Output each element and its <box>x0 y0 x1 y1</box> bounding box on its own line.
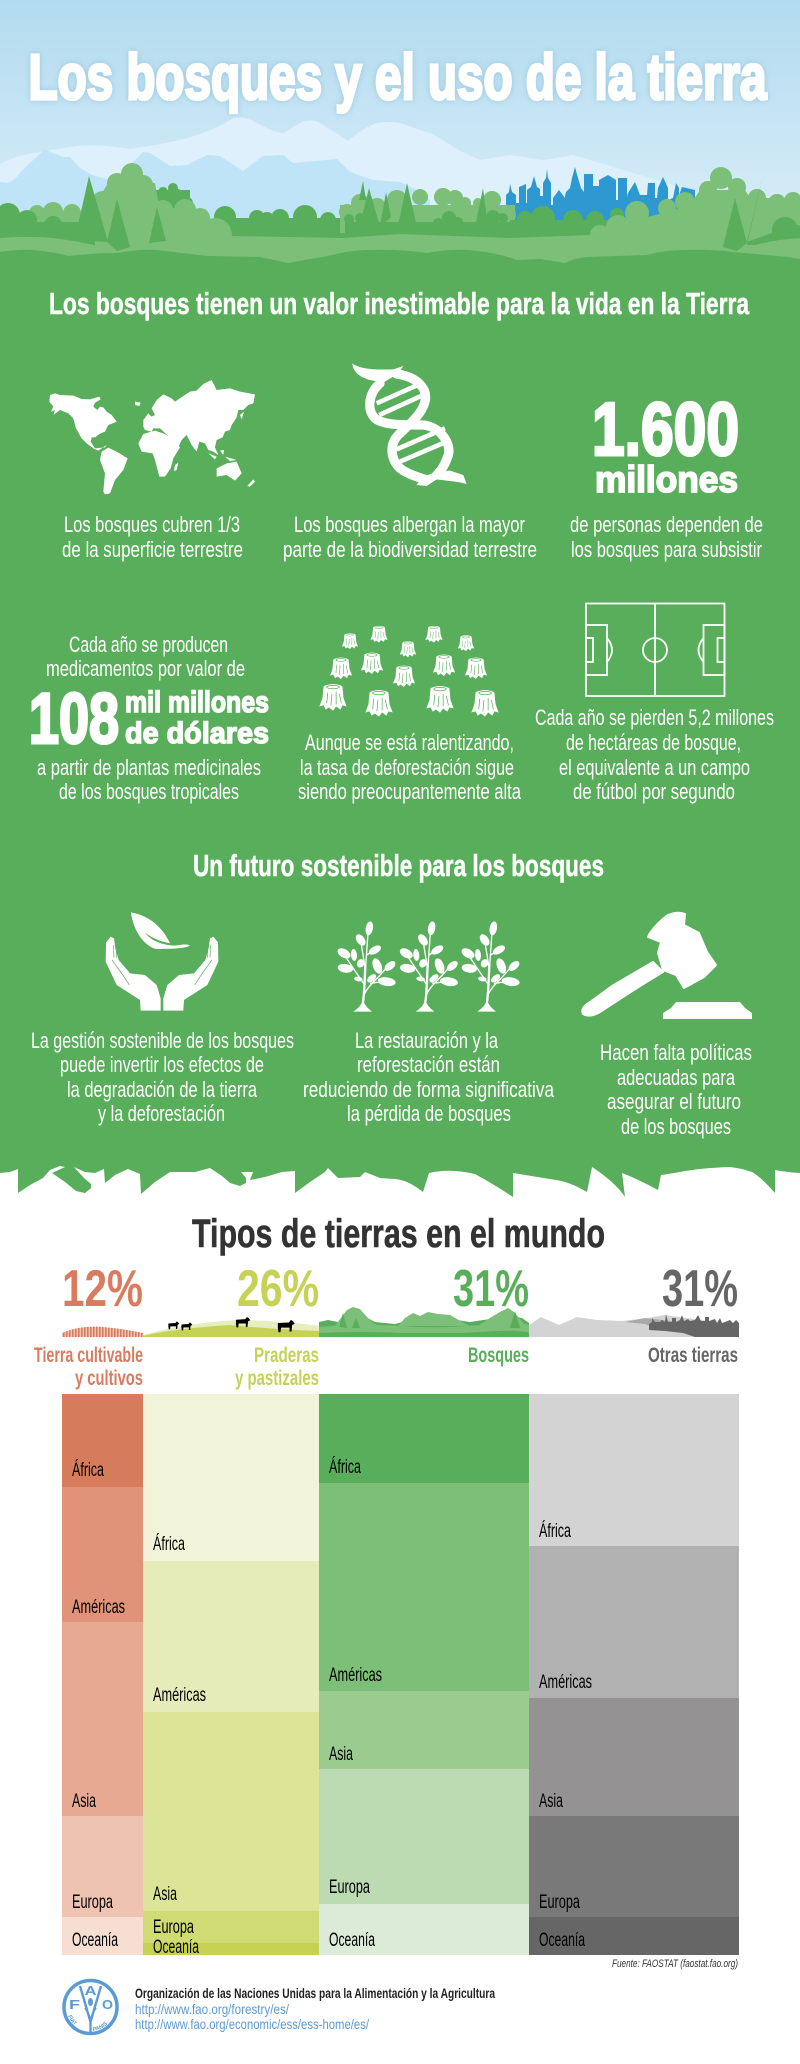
footer: organisation and links: Organización de las Naciones Unidas para la Alimentación y la Agricultura <box>135 1985 495 2001</box>
strip: pasture with animals <box>143 1317 319 1337</box>
panel: hectares lost <box>535 604 774 804</box>
text: deforestation <box>298 730 522 804</box>
panel: medicines: medicamentos por valor de <box>46 656 245 681</box>
stat: 108 mil millones de dólares: mil millones <box>125 686 269 719</box>
chart: land by region, other land column: Asia <box>539 1791 563 1812</box>
icon: FAO logo: O <box>102 1997 113 2012</box>
text: policies <box>600 1040 752 1139</box>
chart: land by region, other land column: Europa <box>539 1892 580 1913</box>
chart: land by region, pasture column: Américas <box>153 1685 206 1706</box>
chart: land by region, cropland column: Américas <box>72 1597 125 1618</box>
category: cropland: y cultivos <box>75 1367 143 1390</box>
source note: Fuente: FAOSTAT (faostat.fao.org) <box>612 1958 738 1970</box>
text: restoration: reduciendo de forma significativa <box>303 1077 555 1102</box>
text: restoration: La restauración y la <box>355 1028 499 1053</box>
text: sustainable management: y la deforestación <box>98 1101 225 1126</box>
chart: land by region, cropland column: Europa <box>72 1892 113 1913</box>
chart: land by region, forest column <box>319 1394 529 1955</box>
icon: tree stumps <box>319 626 499 717</box>
text: forest cover: Los bosques cubren 1/3 <box>64 512 240 537</box>
panel: medicines: Cada año se producen <box>69 632 228 657</box>
panel: medicines <box>29 632 269 804</box>
chart: land by region, forest column: África <box>329 1457 361 1478</box>
text: policies: adecuadas para <box>617 1065 736 1090</box>
icon: hands holding leaf <box>106 912 218 1011</box>
category: pasture: y pastizales <box>235 1367 319 1390</box>
chart: land by region, pasture column <box>143 1394 319 1958</box>
category: cropland: 12% <box>62 1260 143 1318</box>
mid right-centre bushes <box>339 188 516 233</box>
stat: 1.600 millones: 1.600 <box>592 387 739 471</box>
icon: FAO logo: F <box>69 1997 80 2012</box>
panel: medicines: a partir de plantas medicinales <box>37 755 261 780</box>
panel: deforestation <box>298 626 522 804</box>
pale mountains <box>0 118 720 260</box>
header landscape <box>0 0 800 300</box>
chart: land by region, other land column <box>529 1394 739 1955</box>
conifers <box>70 175 800 251</box>
strip: forest <box>319 1307 529 1337</box>
icon: saplings <box>336 921 521 1012</box>
panel: people depending on forests <box>570 387 763 562</box>
text: policies: asegurar el futuro <box>607 1089 741 1114</box>
city skyline <box>506 167 695 222</box>
icon: world map <box>49 380 255 494</box>
category: other land <box>529 1260 739 1367</box>
chart: land by region, forest column: Europa <box>329 1877 370 1898</box>
icon: FAO logo <box>62 1978 119 2036</box>
chart: land by region, cropland column: Asia <box>72 1791 96 1812</box>
chart: land by region, cropland column: África <box>72 1460 104 1481</box>
category: forest: Bosques <box>468 1344 529 1367</box>
category: cropland: Tierra cultivable <box>34 1344 143 1367</box>
text: biodiversity: Los bosques albergan la mayor <box>294 512 525 537</box>
green panel with leafy edge <box>0 250 800 1197</box>
text: sustainable management: La gestión sostenible de los bosques <box>31 1028 294 1053</box>
heading: land types: Tipos de tierras en el mundo <box>192 1212 605 1256</box>
dark right bush <box>772 217 800 243</box>
category: cropland <box>34 1260 143 1390</box>
chart: land by region, pasture column: Asia <box>153 1884 177 1905</box>
stat: 108 mil millones de dólares: de dólares <box>125 717 269 750</box>
text: restoration: reforestación están <box>357 1052 500 1077</box>
strip: other land with city <box>529 1314 739 1337</box>
text: forest cover: de la superficie terrestre <box>62 537 243 562</box>
chart: land by region, cropland column <box>62 1394 143 1955</box>
category: other land: 31% <box>662 1260 738 1318</box>
text: deforestation: Aunque se está ralentizando, <box>305 730 514 755</box>
chart: land by region, other land column: Américas <box>539 1672 592 1693</box>
category: pasture: 26% <box>237 1260 319 1318</box>
chart: land by region, other land column: Oceanía <box>539 1930 585 1951</box>
text: policies: Hacen falta políticas <box>600 1040 752 1065</box>
text: sustainable management: la degradación de la tierra <box>67 1077 258 1102</box>
category: other land: Otras tierras <box>648 1344 738 1367</box>
icon: FAO logo: A <box>84 1983 97 1998</box>
strip: cropland <box>62 1327 143 1337</box>
rolling mid band <box>0 234 800 300</box>
text: people <box>570 512 763 562</box>
chart: land by region, pasture column: Oceanía <box>153 1937 199 1958</box>
panel: medicines: de los bosques tropicales <box>59 779 239 804</box>
chart: land by region, forest column: Américas <box>329 1665 382 1686</box>
text: deforestation: siendo preocupantemente alta <box>298 779 522 804</box>
text: sustainable management <box>31 1028 294 1126</box>
category: forest <box>319 1260 529 1367</box>
text: hectares lost <box>535 705 774 804</box>
footer: organisation and links: http://www.fao.org/forestry/es/ <box>135 2001 289 2017</box>
blue mountains <box>0 150 430 260</box>
text: sustainable management: puede invertir los efectos de <box>60 1052 264 1077</box>
chart: land by region, pasture column: África <box>153 1534 185 1555</box>
stat: 108 mil millones de dólares: 108 <box>29 680 119 759</box>
footer: organisation and links <box>135 1985 495 2032</box>
dark bushes over city <box>344 206 624 242</box>
chart: land by region, forest column: Oceanía <box>329 1930 375 1951</box>
panel: biodiversity <box>283 363 537 562</box>
icon: DNA helix <box>352 363 467 486</box>
stat: 108 mil millones de dólares <box>29 680 269 759</box>
heading: sustainable future: Un futuro sostenible para los bosques <box>193 848 604 883</box>
back dark trees <box>155 183 193 220</box>
dark bush band <box>0 203 800 262</box>
icon: FAO logo: FIAT <box>68 2014 78 2025</box>
icon: gavel <box>582 913 752 1019</box>
text: hectares lost: de fútbol por segundo <box>573 779 735 804</box>
chart: land by region, cropland column: Oceanía <box>72 1930 118 1951</box>
icon: FAO logo: PANIS <box>92 2022 107 2031</box>
text: biodiversity <box>283 512 537 562</box>
text: policies: de los bosques <box>621 1114 731 1139</box>
category: pasture: Praderas <box>254 1344 319 1367</box>
text: forest cover <box>62 512 243 562</box>
text: restoration: la pérdida de bosques <box>347 1101 511 1126</box>
panel: sustainable management <box>31 912 294 1126</box>
icon: football pitch <box>586 604 724 696</box>
category: pasture <box>143 1260 319 1390</box>
panel: policies <box>582 913 752 1139</box>
category: forest: 31% <box>453 1260 529 1318</box>
mid bushes left <box>29 202 81 230</box>
mid right trees <box>590 167 800 262</box>
text: biodiversity: parte de la biodiversidad terrestre <box>283 537 537 562</box>
chart: land by region, other land column: África <box>539 1521 571 1542</box>
text: deforestation: la tasa de deforestación sigue <box>300 755 514 780</box>
stat: 1.600 millones <box>592 387 739 500</box>
mid left big tree <box>91 163 232 255</box>
panel: forest cover <box>49 380 255 562</box>
chart: land by region, forest column: Asia <box>329 1744 353 1765</box>
footer: organisation and links: http://www.fao.org/economic/ess/ess-home/es/ <box>135 2016 369 2032</box>
text: restoration <box>303 1028 555 1126</box>
chart: land by region, pasture column: Europa <box>153 1917 194 1938</box>
panel: restoration <box>303 921 555 1126</box>
stat: 1.600 millones: millones <box>595 459 738 500</box>
